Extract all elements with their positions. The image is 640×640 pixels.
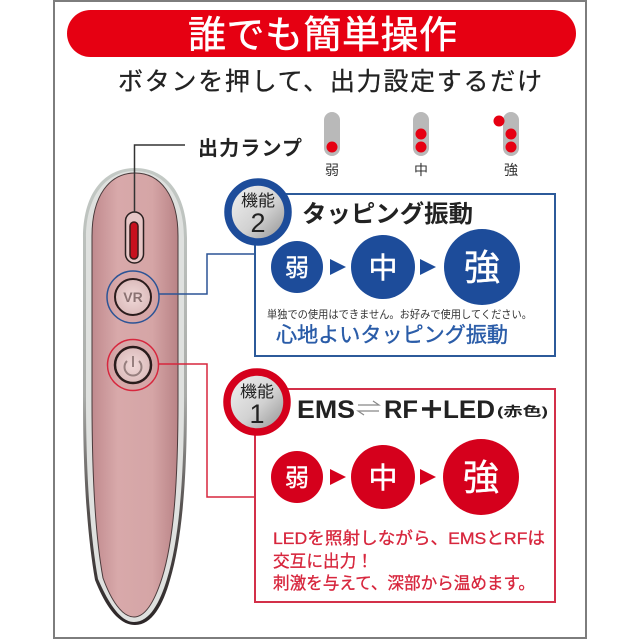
heading: [297, 396, 548, 424]
heading: RF: [384, 396, 418, 424]
device illustration: [83, 168, 187, 625]
lamp indicator: weak: [324, 112, 340, 178]
intensity steps: 中: [368, 462, 398, 495]
note: 単独での使用はできません。お好みで使用してください。: [267, 307, 532, 321]
lamp indicator: weak: 弱: [325, 162, 339, 178]
red description: LEDを照射しながら、EMSとRFは: [273, 529, 545, 548]
leader line: output lamp: [134, 145, 185, 212]
heading: タッピング振動: [302, 200, 473, 228]
title banner: [67, 10, 576, 57]
panel: function 1 EMS RF LED: [227, 372, 555, 602]
VR button: VR: [123, 289, 143, 305]
VR button: [115, 279, 151, 315]
badge: function 1: 1: [249, 399, 265, 429]
intensity steps: 弱: [285, 255, 309, 282]
lamp indicator: medium: 中: [414, 162, 428, 178]
lamp indicator: medium: [413, 112, 429, 178]
heading: EMS: [297, 396, 355, 424]
badge: function 1: 機能: [240, 383, 274, 401]
red description: [273, 529, 545, 593]
lamp indicator: strong: [494, 112, 519, 178]
output lamp label: 出力ランプ: [198, 137, 302, 160]
leader line: VR button to function 2: [107, 254, 255, 323]
intensity steps: [271, 439, 519, 515]
title banner: 誰でも簡単操作: [188, 15, 457, 57]
intensity steps: 中: [368, 252, 398, 285]
intensity steps: [271, 229, 520, 305]
leader line: power button to function 1: [108, 340, 255, 497]
intensity steps: 弱: [285, 465, 309, 492]
red description: 交互に出力！: [273, 552, 373, 571]
badge: function 1: [227, 372, 287, 432]
intensity steps: 強: [464, 247, 500, 288]
badge: function 2: 機能: [241, 192, 275, 210]
device lamp window: [126, 212, 144, 263]
intensity steps: 強: [463, 457, 499, 498]
panel: function 2 tapping vibration: [228, 182, 555, 356]
badge: function 2: 2: [250, 208, 266, 238]
subtitle: ボタンを押して、出力設定するだけ: [118, 68, 542, 96]
red description: 刺激を与えて、深部から温めます。: [273, 574, 535, 593]
heading: (赤色): [497, 404, 548, 419]
heading: LED: [443, 396, 495, 424]
badge: function 2: [228, 182, 288, 242]
power button: [115, 347, 151, 383]
lamp indicator: strong: 強: [504, 162, 518, 178]
blue caption: 心地よいタッピング振動: [276, 324, 508, 347]
